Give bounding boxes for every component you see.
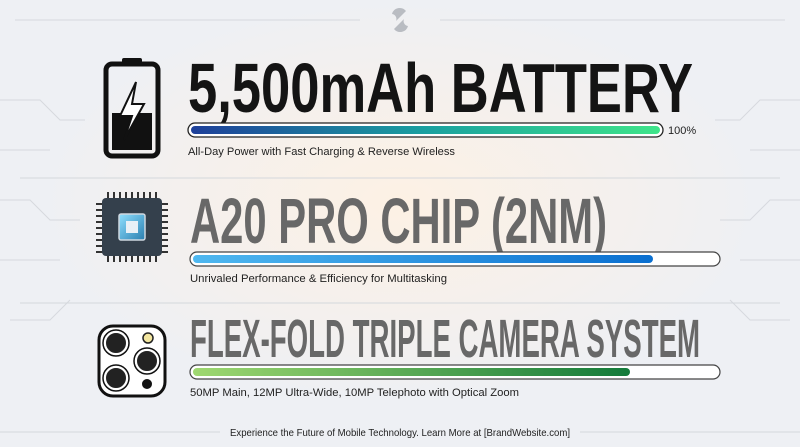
footer: Experience the Future of Mobile Technology. Learn More at [BrandWebsite.com] <box>230 427 570 439</box>
label: 100%: 100% <box>668 125 696 137</box>
text: chip description: Unrivaled Performance & Efficiency for Multitasking <box>190 273 447 285</box>
text: camera description: 50MP Main, 12MP Ultra-Wide, 10MP Telephoto with Optical Zoom <box>190 387 519 399</box>
text: battery description: All-Day Power with Fast Charging & Reverse Wireless <box>188 146 455 158</box>
logo <box>392 8 408 32</box>
icon: battery <box>106 58 158 156</box>
icon: chip <box>96 192 168 262</box>
bar: battery <box>188 123 663 137</box>
bar: chip <box>190 252 720 266</box>
icon: camera <box>99 326 165 396</box>
bar: camera <box>190 365 720 379</box>
